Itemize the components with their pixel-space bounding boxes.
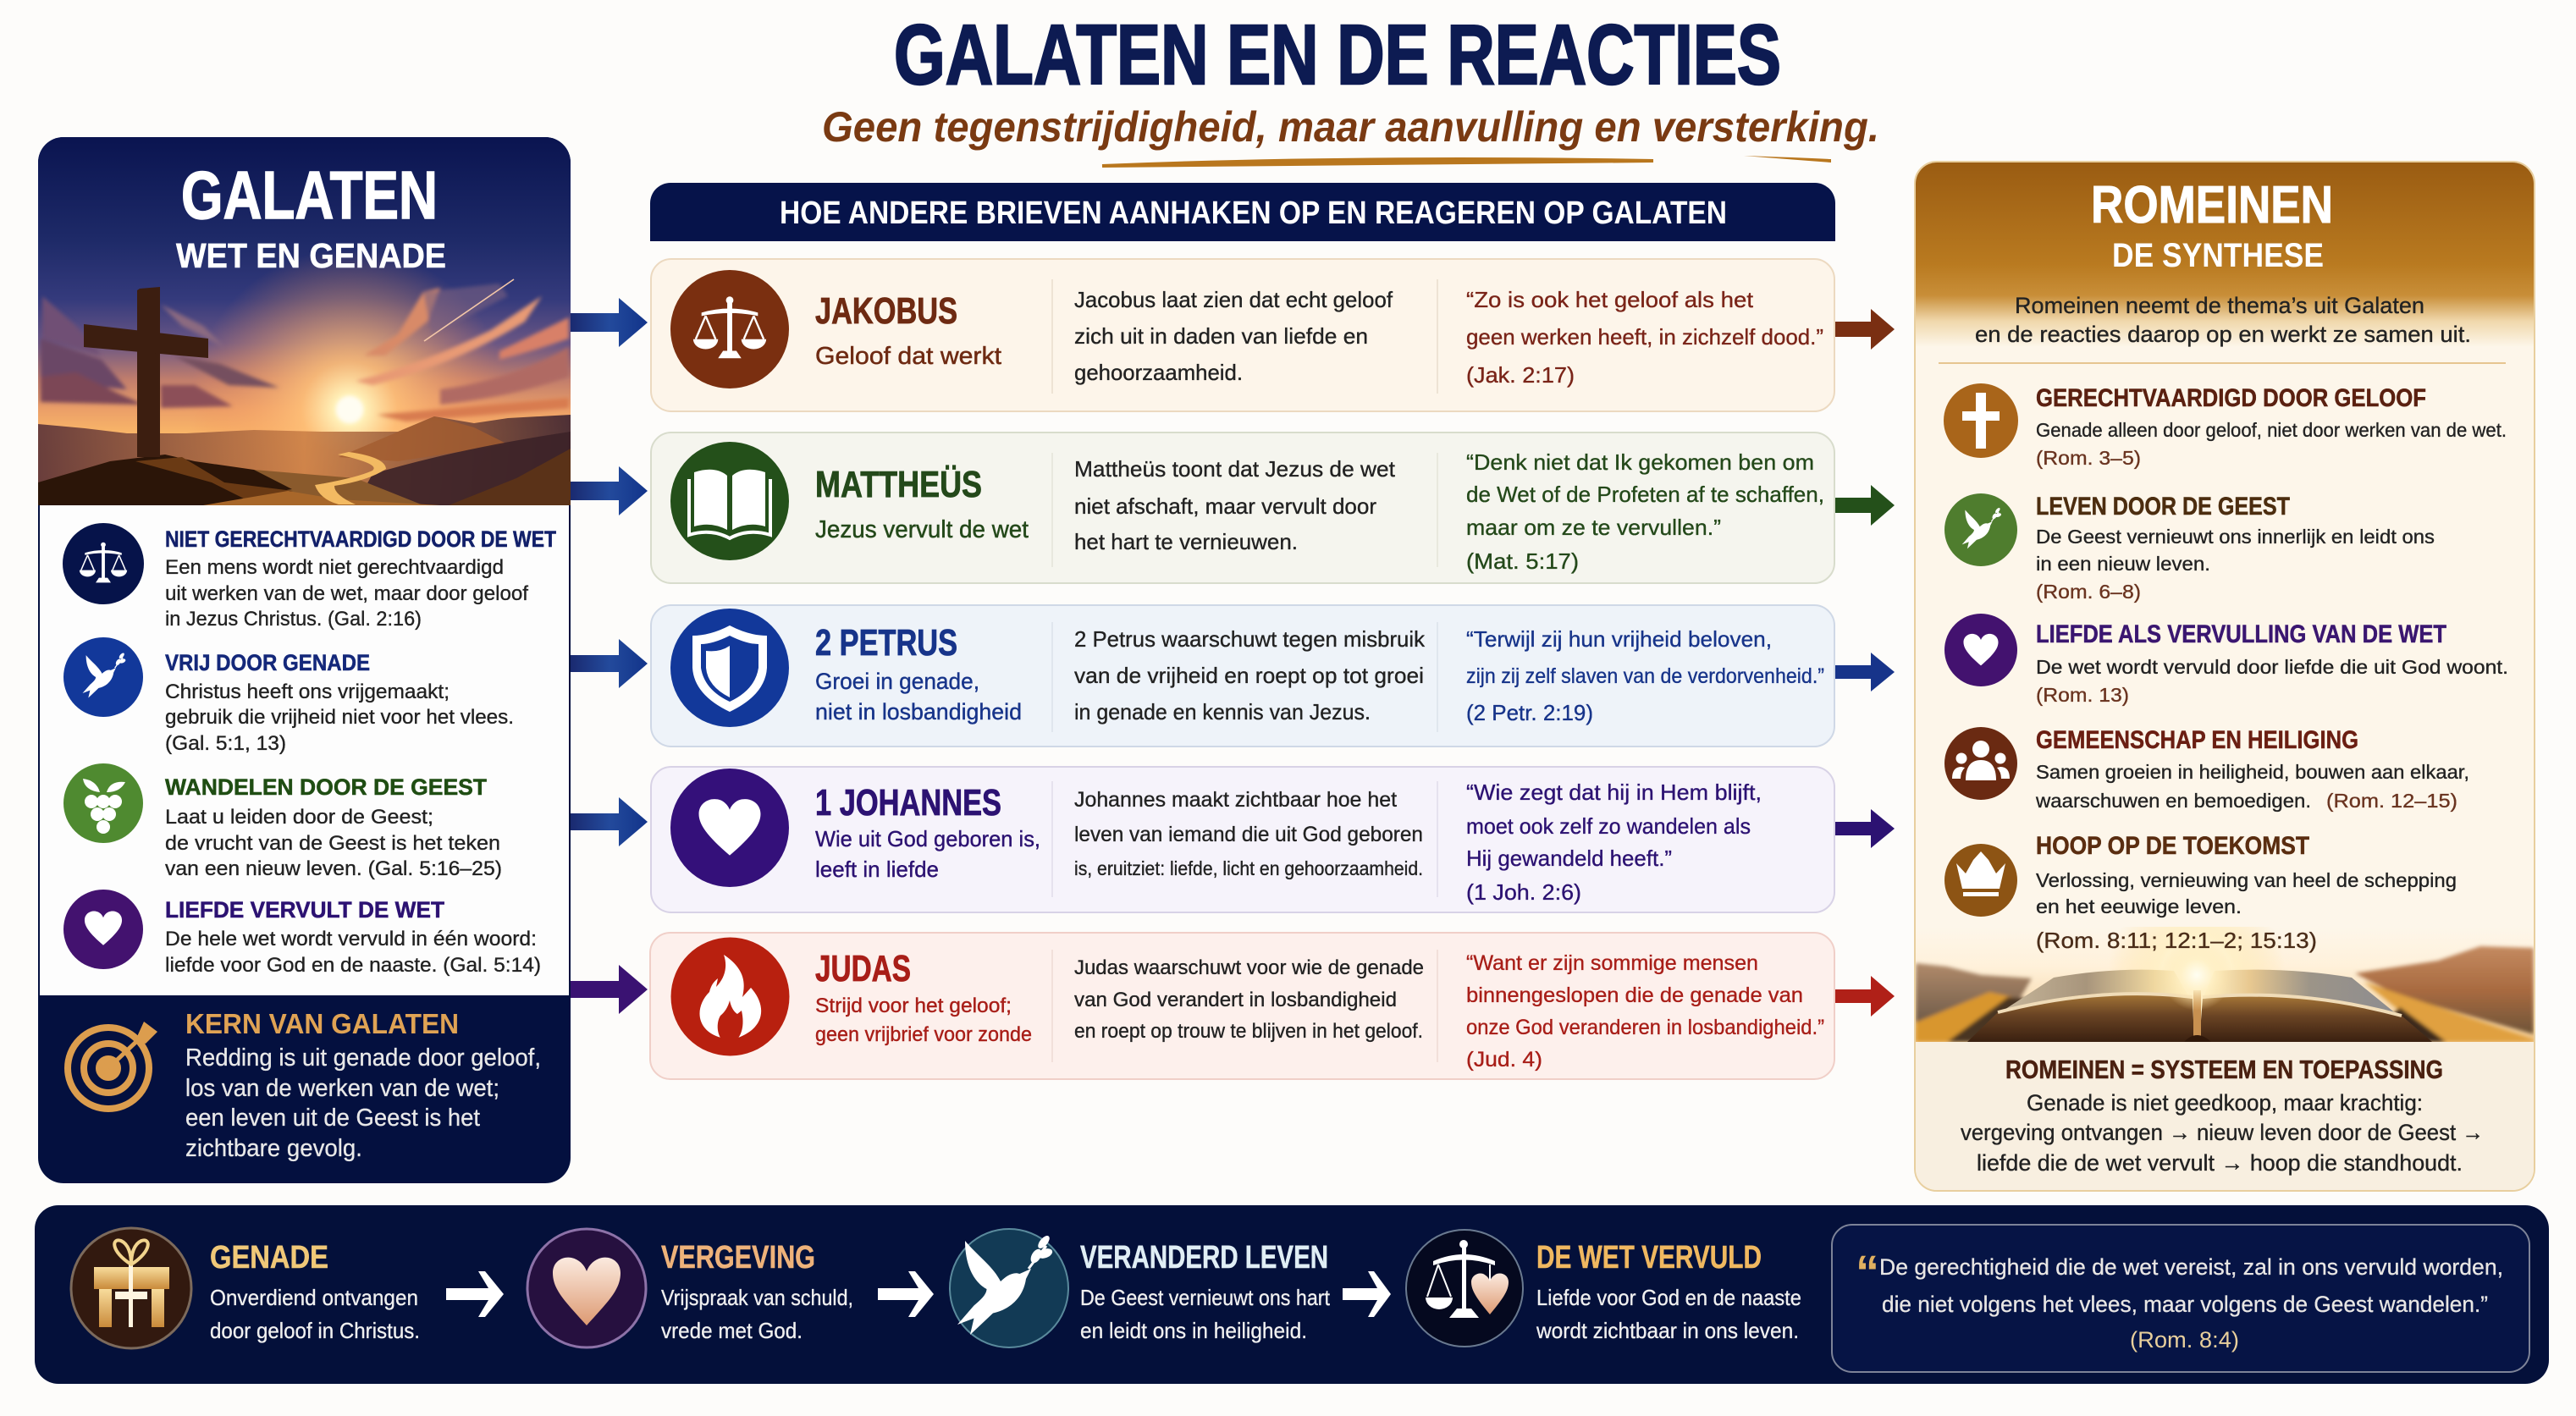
subheading: wet en genade: WET EN GENADE [176, 236, 446, 275]
step: veranderd leven: VERANDERD LEVEN [1080, 1240, 1328, 1276]
heading: Mattheus: MATTHEÜS [815, 464, 982, 505]
text: Mattheus description: Mattheüs toont dat Jezus de wet [1074, 456, 1396, 482]
panel header: hoe andere brieven [650, 183, 1835, 241]
text: Judas description: en roept op trouw te blijven in het geloof. [1074, 1020, 1423, 1043]
subtitle underline swoosh [1102, 156, 1831, 166]
item: vrij door genade [165, 650, 514, 755]
subtitle: Geen tegenstrijdigheid, maar aanvulling en versterking. [822, 103, 1879, 151]
item: leven door de geest: LEVEN DOOR DE GEEST [2036, 493, 2290, 521]
item: liefde als vervulling van de wet: (Rom. 13) [2036, 684, 2129, 706]
step: genade [210, 1240, 420, 1343]
icon: large dove [950, 1229, 1068, 1347]
card: 1 Johannes [651, 767, 1834, 912]
item: vrij door genade: (Gal. 5:1, 13) [165, 732, 286, 755]
quote: Mattheus [1466, 449, 1824, 574]
item: leven door de geest: De Geest vernieuwt ons innerlijk en leidt ons [2036, 526, 2435, 548]
quote: Jakobus: (Jak. 2:17) [1466, 362, 1575, 388]
card: Mattheus [651, 433, 1834, 583]
item: leven door de geest: (Rom. 6–8) [2036, 581, 2141, 603]
icon: heart [670, 769, 789, 887]
title: GALATEN EN DE REACTIES [894, 8, 1781, 102]
heading: Romeinen: ROMEINEN [2091, 176, 2333, 234]
item: gemeenschap en heiliging: waarschuwen en bemoedigen. [2035, 790, 2311, 812]
item: hoop op de toekomst: HOOP OP DE TOEKOMST [2036, 832, 2309, 860]
heading: 1 Johannes: leeft in liefde [815, 857, 939, 882]
item: gerechtvaardigd door geloof: (Rom. 3–5) [2036, 447, 2141, 469]
quote: 1 Johannes [1466, 780, 1762, 905]
text: Jakobus description: Jacobus laat zien dat echt geloof [1074, 287, 1393, 312]
quote: Mattheus: “Denk niet dat Ik gekomen ben om [1466, 449, 1814, 475]
panel: Romeinen [1915, 162, 2535, 1191]
arrow 2 [878, 1271, 934, 1317]
bottom band [35, 1205, 2549, 1384]
panel: Galaten [38, 137, 571, 1183]
quote: Mattheus: (Mat. 5:17) [1466, 548, 1579, 574]
illustration: open Bible with landscape [1916, 927, 2534, 1042]
intro text [1975, 293, 2471, 347]
step: vergeving: VERGEVING [661, 1240, 815, 1276]
heading: Galaten: GALATEN [181, 157, 438, 233]
sunset illustration with cross [38, 137, 571, 505]
callout: Rom. 8:4 quote: (Rom. 8:4) [2130, 1327, 2239, 1353]
heading: Judas: geen vrijbrief voor zonde [815, 1023, 1032, 1046]
card: Jakobus [651, 259, 1834, 411]
icon: heart glowing [527, 1229, 646, 1347]
text: Judas description [1074, 956, 1424, 1043]
item: leven door de geest [2036, 493, 2435, 603]
step: vergeving [661, 1240, 853, 1343]
step: veranderd leven: en leidt ons in heiligheid. [1080, 1318, 1307, 1343]
item: wandelen door de geest: WANDELEN DOOR DE GEEST [165, 774, 487, 800]
item: niet gerechtvaardigd door de wet: in Jezus Christus. (Gal. 2:16) [165, 608, 422, 631]
text: Jakobus description: zich uit in daden van liefde en [1074, 323, 1368, 349]
text: 2 Petrus description: van de vrijheid en roept op tot groei [1074, 663, 1424, 688]
callout: Rom. 8:4 quote: De gerechtigheid die de wet vereist, zal in ons vervuld worden, [1879, 1254, 2503, 1280]
text: Mattheus description [1074, 456, 1396, 554]
subheading: de synthese: DE SYNTHESE [2112, 237, 2324, 274]
heading: 2 Petrus: niet in losbandigheid [815, 699, 1022, 725]
item: hoop op de toekomst: en het eeuwige leven. [2036, 895, 2242, 917]
quote: Judas: binnengeslopen die de genade van [1466, 983, 1803, 1007]
item: liefde vervult de wet: De hele wet wordt vervuld in één woord: [165, 928, 537, 950]
icon: scales [670, 270, 789, 388]
step: genade: door geloof in Christus. [210, 1318, 420, 1343]
item: niet gerechtvaardigd door de wet: Een mens wordt niet gerechtvaardigd [165, 556, 504, 579]
callout: Romeinen systeem en toepassing: Genade is niet geedkoop, maar krachtig: [2027, 1090, 2423, 1116]
item: vrij door genade: gebruik die vrijheid niet voor het vlees. [165, 706, 514, 729]
item: hoop op de toekomst: (Rom. 8:11; 12:1–2; 15:13) [2036, 928, 2317, 953]
callout: Romeinen systeem en toepassing: ROMEINEN = SYSTEEM EN TOEPASSING [2005, 1055, 2443, 1084]
step: vergeving: Vrijspraak van schuld, [661, 1285, 853, 1310]
item: niet gerechtvaardigd door de wet [165, 526, 556, 631]
quote: 1 Johannes: Hij gewandeld heeft.” [1466, 846, 1672, 871]
item: niet gerechtvaardigd door de wet: uit werken van de wet, maar door geloof [165, 582, 528, 605]
heading: 2 Petrus: 2 PETRUS [815, 622, 957, 664]
quote: 1 Johannes: “Wie zegt dat hij in Hem blijft, [1466, 780, 1762, 805]
quote: 2 Petrus [1466, 626, 1824, 725]
callout: Romeinen systeem en toepassing: vergeving ontvangen → nieuw leven door de Geest → [1961, 1120, 2484, 1145]
item: wandelen door de geest [165, 774, 502, 880]
intro text: Romeinen neemt de thema’s uit Galaten [2015, 293, 2424, 318]
icon: dove blue [63, 637, 143, 717]
step: veranderd leven: De Geest vernieuwt ons hart [1080, 1285, 1331, 1310]
heading: Jakobus [815, 290, 1001, 370]
header gradient [1916, 163, 2534, 347]
item: liefde vervult de wet: liefde voor God en de naaste. (Gal. 5:14) [165, 954, 541, 977]
heading: 1 Johannes [815, 782, 1040, 882]
icon: crown [1944, 844, 2017, 917]
heading: Judas: JUDAS [815, 948, 911, 989]
callout: kern van Galaten [185, 1008, 541, 1162]
intro text: en de reacties daarop op en werkt ze samen uit. [1975, 322, 2471, 347]
item: liefde als vervulling van de wet: De wet wordt vervuld door liefde die uit God woont. [2036, 656, 2508, 678]
heading: 1 Johannes: 1 JOHANNES [815, 782, 1001, 824]
callout: kern van Galaten: een leven uit de Geest is het [185, 1105, 480, 1132]
quote: Mattheus: maar om ze te vervullen.” [1466, 515, 1721, 540]
text: Judas description: Judas waarschuwt voor wie de genade [1074, 956, 1424, 979]
icon: scales with heart [1406, 1230, 1523, 1347]
quote: Jakobus: geen werken heeft, in zichzelf dood.” [1466, 324, 1823, 350]
text: Jakobus description: gehoorzaamheid. [1074, 360, 1243, 385]
item: wandelen door de geest: Laat u leiden door de Geest; [165, 806, 433, 829]
card: 2 Petrus [651, 605, 1834, 747]
step: genade: Onverdiend ontvangen [210, 1285, 418, 1310]
item: gemeenschap en heiliging [2035, 726, 2469, 812]
icon: grapes green [63, 763, 143, 843]
text: 2 Petrus description: 2 Petrus waarschuwt tegen misbruik [1074, 626, 1426, 652]
item: vrij door genade: VRIJ DOOR GENADE [165, 650, 370, 675]
item: liefde als vervulling van de wet [2036, 620, 2508, 706]
icon: flame [670, 938, 789, 1056]
item: gerechtvaardigd door geloof: GERECHTVAARDIGD DOOR GELOOF [2036, 384, 2426, 412]
item: liefde vervult de wet: LIEFDE VERVULT DE WET [165, 897, 444, 923]
step: genade: GENADE [210, 1240, 328, 1276]
step: vergeving: vrede met God. [661, 1318, 803, 1343]
sky clouds and streaks [41, 284, 569, 421]
text: 2 Petrus description [1074, 626, 1426, 725]
step: de wet vervuld: DE WET VERVULD [1536, 1240, 1762, 1276]
item: hoop op de toekomst [2036, 832, 2457, 953]
callout: Romeinen systeem en toepassing [1916, 1042, 2534, 1190]
quote: Judas: “Want er zijn sommige mensen [1466, 951, 1758, 975]
icon: heart purple [63, 890, 143, 969]
heading: Mattheus: Jezus vervult de wet [815, 516, 1029, 543]
callout: kern van Galaten: KERN VAN GALATEN [185, 1008, 459, 1039]
text: 1 Johannes description: is, eruitziet: liefde, licht en gehoorzaamheid. [1074, 857, 1423, 879]
hill and foreground [38, 455, 292, 505]
heading: 2 Petrus [815, 622, 1022, 725]
arrows: Galaten to letters [571, 298, 648, 1014]
icon: cross [1944, 383, 2018, 458]
callout: kern van Galaten: los van de werken van de wet; [185, 1075, 499, 1102]
item: gerechtvaardigd door geloof: Genade alleen door geloof, niet door werken van de wet. [2036, 419, 2507, 441]
step: veranderd leven [1080, 1240, 1331, 1343]
arrow 1 [446, 1271, 504, 1317]
item: gemeenschap en heiliging: (Rom. 12–15) [2326, 790, 2457, 812]
heading: Judas: Strijd voor het geloof; [815, 995, 1012, 1017]
quote: Jakobus [1466, 287, 1823, 388]
item: gerechtvaardigd door geloof [2036, 384, 2507, 469]
arrow 3 [1343, 1271, 1391, 1317]
heading: Judas [815, 948, 1032, 1046]
item: hoop op de toekomst: Verlossing, vernieuwing van heel de schepping [2036, 869, 2457, 891]
icon: people [1944, 727, 2017, 800]
text: 1 Johannes description [1074, 788, 1423, 879]
item: liefde als vervulling van de wet: LIEFDE ALS VERVULLING VAN DE WET [2036, 620, 2446, 648]
quote: Mattheus: de Wet of de Profeten af te schaffen, [1466, 482, 1824, 507]
icon: gift [71, 1228, 191, 1348]
icon: heart purple [1944, 614, 2017, 686]
quote: 2 Petrus: zijn zij zelf slaven van de verdorvenheid.” [1466, 664, 1824, 688]
distant land [38, 415, 571, 505]
callout: kern van Galaten: zichtbare gevolg. [185, 1135, 362, 1162]
item: niet gerechtvaardigd door de wet: NIET GERECHTVAARDIGD DOOR DE WET [165, 526, 556, 552]
heading: Jakobus: Geloof dat werkt [815, 343, 1001, 370]
text: 1 Johannes description: leven van iemand die uit God geboren [1074, 823, 1423, 846]
item: gemeenschap en heiliging: Samen groeien in heiligheid, bouwen aan elkaar, [2036, 761, 2469, 783]
arrows: letters to Romeinen [1835, 309, 1895, 1017]
callout: Romeinen systeem en toepassing: liefde die de wet vervult → hoop die standhoudt. [1977, 1150, 2463, 1176]
quote: Judas: onze God veranderen in losbandigheid.” [1466, 1016, 1824, 1039]
card: Judas [650, 933, 1834, 1079]
icon: shield [670, 609, 789, 727]
quote: Judas: (Jud. 4) [1466, 1048, 1542, 1072]
callout: kern van Galaten: Redding is uit genade door geloof, [185, 1044, 541, 1072]
item: vrij door genade: Christus heeft ons vrijgemaakt; [165, 680, 450, 703]
icon: scales navy [63, 523, 144, 604]
quote: 2 Petrus: (2 Petr. 2:19) [1466, 700, 1593, 725]
heading: Mattheus [815, 464, 1029, 543]
item: wandelen door de geest: van een nieuw leven. (Gal. 5:16–25) [165, 857, 502, 880]
text: 2 Petrus description: in genade en kennis van Jezus. [1074, 699, 1371, 725]
callout: Rom. 8:4 quote: die niet volgens het vlees, maar volgens de Geest wandelen.” [1882, 1292, 2488, 1317]
step: de wet vervuld: Liefde voor God en de naaste [1536, 1285, 1801, 1310]
step: de wet vervuld: wordt zichtbaar in ons leven. [1536, 1318, 1799, 1343]
panel header: hoe andere brieven: HOE ANDERE BRIEVEN AANHAKEN OP EN REAGEREN OP GALATEN [780, 196, 1727, 231]
heading: Jakobus: JAKOBUS [815, 290, 957, 332]
icon: target with arrow [68, 1022, 157, 1109]
heading: 1 Johannes: Wie uit God geboren is, [815, 826, 1040, 851]
text: 1 Johannes description: Johannes maakt zichtbaar hoe het [1074, 788, 1397, 812]
quote: 1 Johannes: (1 Joh. 2:6) [1466, 879, 1581, 905]
item: leven door de geest: in een nieuw leven. [2036, 553, 2210, 575]
callout: Rom. 8:4 quote [1832, 1225, 2529, 1372]
icon: dove green [1944, 493, 2017, 566]
text: Mattheus description: niet afschaft, maar vervult door [1074, 493, 1376, 519]
item: gemeenschap en heiliging: GEMEENSCHAP EN HEILIGING [2036, 726, 2358, 754]
text: Mattheus description: het hart te vernieuwen. [1074, 529, 1298, 554]
heading: 2 Petrus: Groei in genade, [815, 669, 979, 694]
item: liefde vervult de wet [165, 897, 541, 977]
item: wandelen door de geest: de vrucht van de Geest is het teken [165, 832, 500, 855]
quote: 1 Johannes: moet ook zelf zo wandelen als [1466, 813, 1751, 839]
text: Jakobus description [1074, 287, 1393, 385]
quote: Judas [1466, 951, 1824, 1072]
text: Judas description: van God verandert in losbandigheid [1074, 989, 1397, 1011]
quote: 2 Petrus: “Terwijl zij hun vrijheid beloven, [1466, 626, 1772, 652]
icon: open book [670, 442, 789, 560]
quote: Jakobus: “Zo is ook het geloof als het [1466, 287, 1754, 312]
callout: Rom. 8:4 quote: “ [1856, 1245, 1879, 1298]
wooden cross [84, 287, 208, 457]
step: de wet vervuld [1536, 1240, 1801, 1343]
